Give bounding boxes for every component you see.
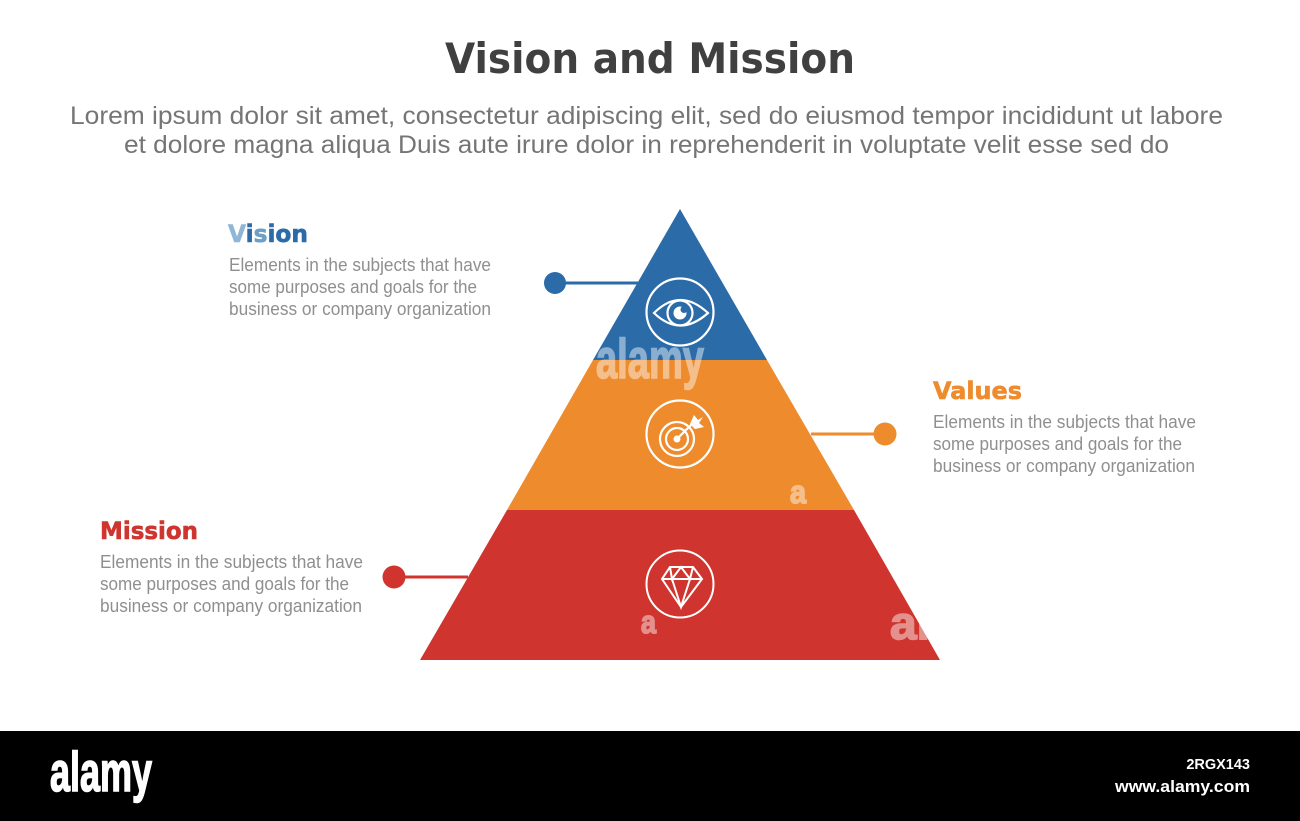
connector: mission [382,566,468,588]
text block: values: business or company organization [933,456,1195,476]
icon: target with arrow [646,400,714,468]
text block: vision: Elements in the subjects that have [229,255,491,275]
connector: values [811,422,896,446]
image id: 2RGX143 [1186,757,1250,773]
subtitle text [70,102,1223,159]
watermark fragments on pyramid: alamy [596,327,704,390]
footer logo: alamy [50,740,152,803]
text block: values: Values [933,377,1022,405]
text block: mission: business or company organization [100,596,362,616]
text block: values [933,377,1196,476]
footer bar [0,731,1300,821]
text block: values: Elements in the subjects that have [933,412,1196,432]
text block: vision: some purposes and goals for the [229,277,477,297]
text block: mission [100,517,363,616]
text block: mission: Elements in the subjects that have [100,552,363,572]
watermark fragments on pyramid: al [890,597,930,649]
text block: mission: some purposes and goals for the [100,574,349,594]
subtitle text: et dolore magna aliqua Duis aute irure dolor in reprehenderit in voluptate velit esse sed do [124,131,1169,159]
text block: mission: Mission [100,517,198,545]
watermark fragments on pyramid [596,327,930,649]
watermark fragments on pyramid: a [790,474,806,510]
connector: vision [544,272,638,294]
icon: eye [646,278,714,346]
icon: diamond [646,550,714,618]
pyramid tier: values [507,360,854,510]
website: www.alamy.com [1114,777,1250,796]
text block: values: some purposes and goals for the [933,434,1182,454]
pyramid tier: mission [420,510,940,660]
subtitle text: Lorem ipsum dolor sit amet, consectetur adipiscing elit, sed do eiusmod tempor incididunt ut labore [70,102,1223,130]
text block: vision [228,220,491,319]
pyramid tier: vision [593,209,767,360]
text block: vision: Vision [228,220,308,248]
text block: vision: business or company organization [229,299,491,319]
title: Vision and Mission [445,34,855,83]
watermark fragments on pyramid: a [641,604,656,640]
pyramid chart [420,209,940,660]
